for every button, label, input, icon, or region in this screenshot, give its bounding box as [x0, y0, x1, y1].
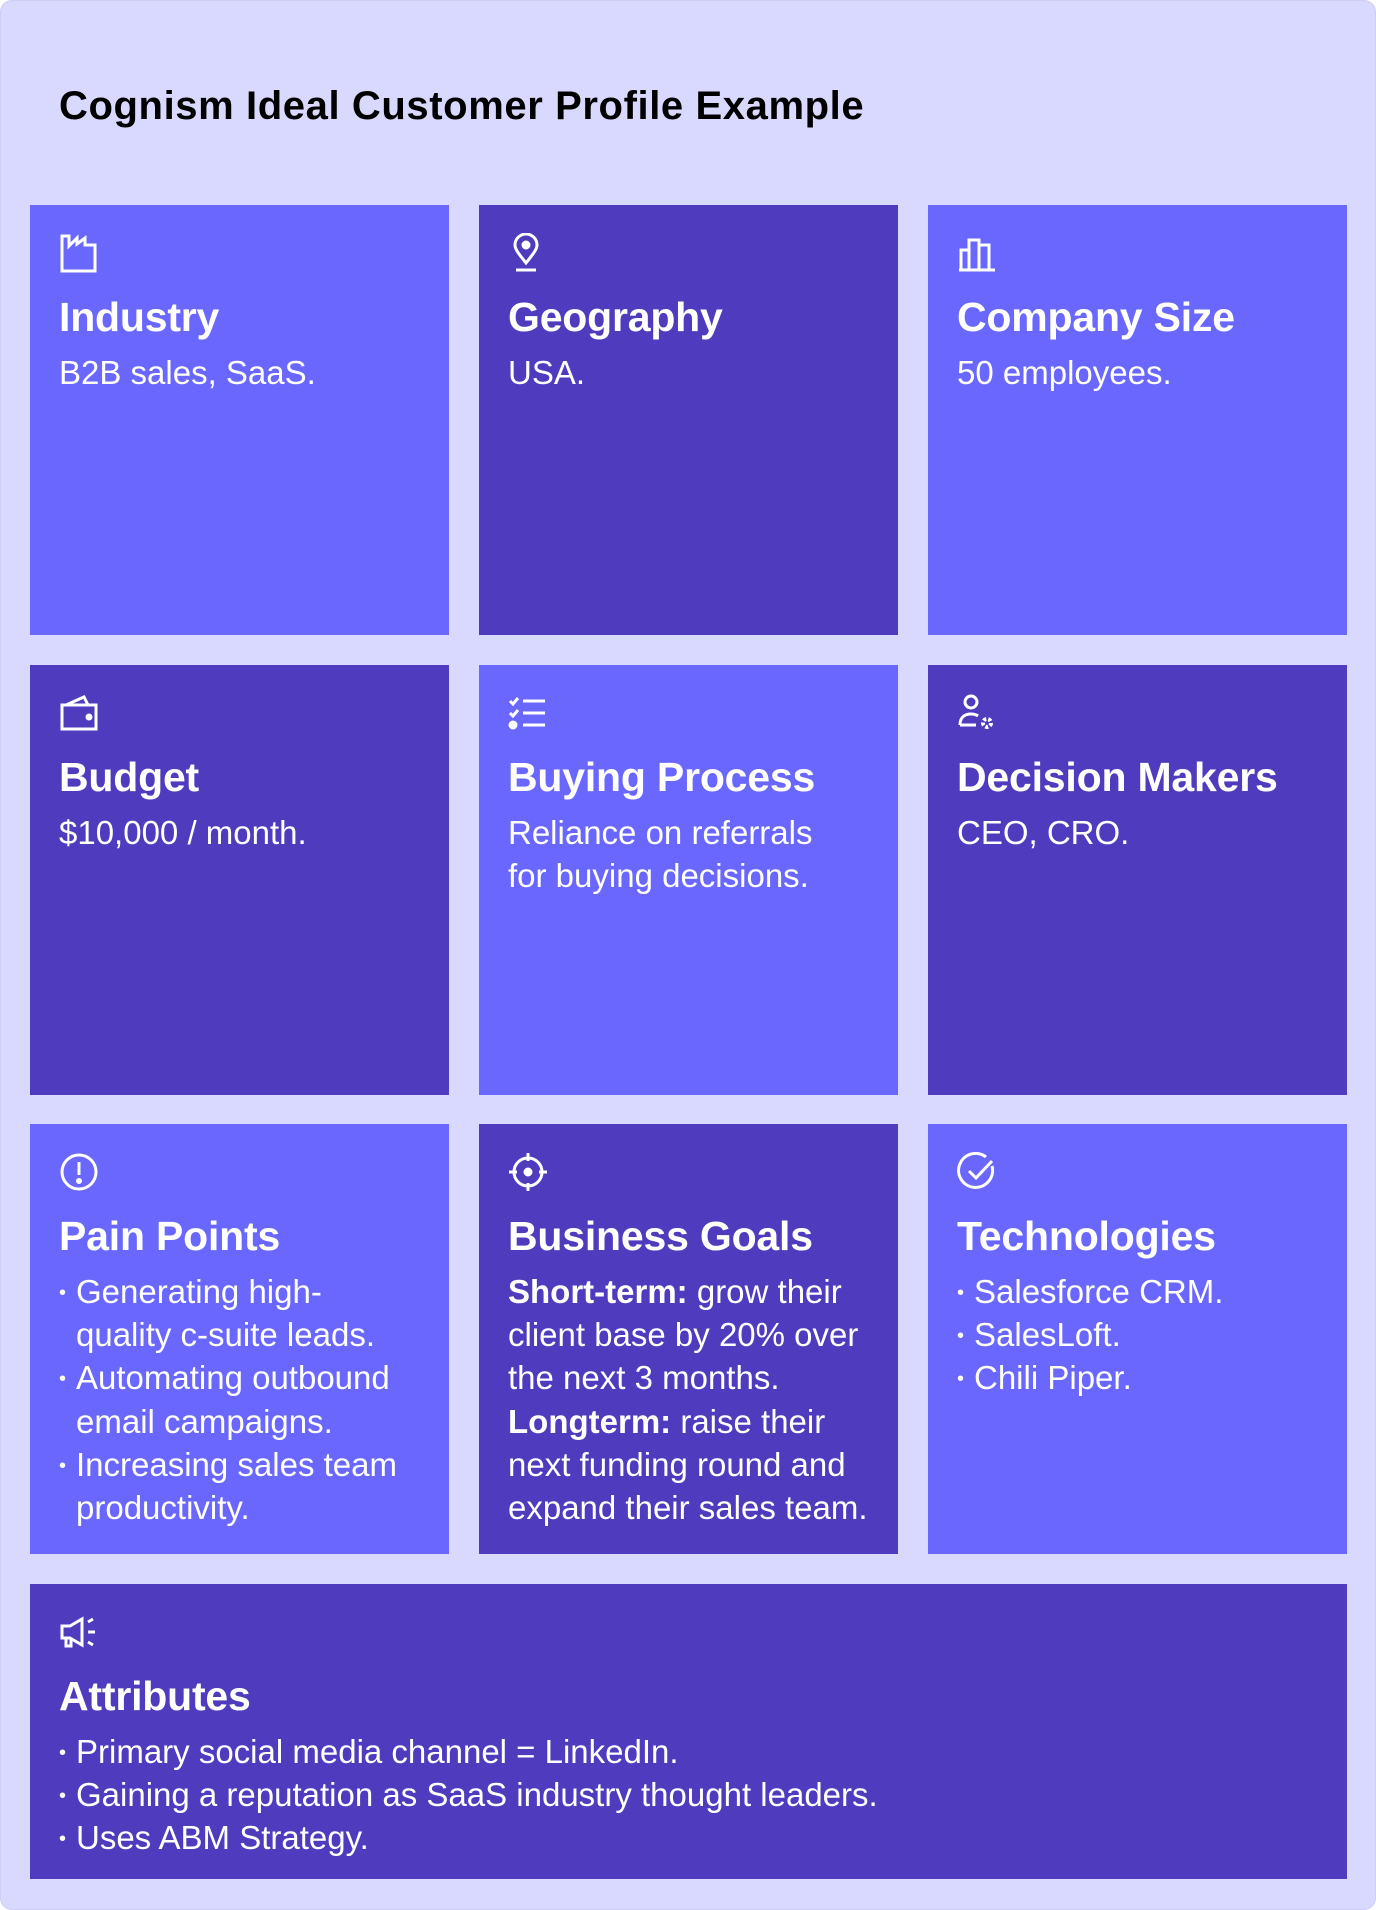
panel: buying process — [479, 665, 898, 1095]
bullet list: Generating high- — [76, 1273, 322, 1310]
bullet list: Increasing sales team — [76, 1446, 397, 1483]
text: for buying decisions. — [508, 857, 809, 894]
text: CEO, CRO. — [957, 814, 1129, 851]
bullet list: email campaigns. — [76, 1403, 333, 1440]
bullet list: SalesLoft. — [974, 1316, 1121, 1353]
text: client base by 20% over — [508, 1316, 858, 1353]
bullet list — [958, 1273, 1223, 1396]
panel: budget — [30, 665, 449, 1095]
panel: technologies — [928, 1124, 1347, 1554]
icon: factory — [60, 234, 96, 272]
icon: location pin — [514, 233, 538, 272]
text: USA. — [508, 354, 585, 391]
text: Longterm: raise their — [508, 1403, 825, 1440]
panel: decision makers — [928, 665, 1347, 1095]
panel: geography — [479, 205, 898, 635]
text — [508, 1273, 868, 1526]
icon: megaphone — [60, 1616, 95, 1648]
text: Short-term: grow their — [508, 1273, 842, 1310]
heading: Industry — [59, 294, 219, 340]
panel: industry — [30, 205, 449, 635]
bullet list: Salesforce CRM. — [974, 1273, 1223, 1310]
icon: wallet — [60, 695, 98, 730]
heading: Business Goals — [508, 1213, 813, 1259]
icon: checklist — [508, 697, 545, 730]
heading: Decision Makers — [957, 754, 1278, 800]
panel: attributes — [30, 1584, 1347, 1879]
heading: Company Size — [957, 294, 1235, 340]
heading: Geography — [508, 294, 723, 340]
icon: user gear — [958, 694, 993, 729]
heading: Pain Points — [59, 1213, 280, 1259]
bullet list — [60, 1733, 878, 1856]
text: the next 3 months. — [508, 1359, 780, 1396]
bullet list: Uses ABM Strategy. — [76, 1819, 369, 1856]
text: next funding round and — [508, 1446, 846, 1483]
text: 50 employees. — [957, 354, 1172, 391]
text: $10,000 / month. — [59, 814, 307, 851]
panel: pain points — [30, 1124, 449, 1554]
heading: Buying Process — [508, 754, 815, 800]
heading: Attributes — [59, 1673, 251, 1719]
panel: company size — [928, 205, 1347, 635]
text: Reliance on referrals — [508, 814, 812, 851]
text — [508, 814, 812, 894]
heading: Technologies — [957, 1213, 1216, 1259]
icon: check circle — [957, 1152, 994, 1189]
heading: Budget — [59, 754, 199, 800]
icon: buildings — [959, 238, 995, 272]
title: Cognism Ideal Customer Profile Example — [59, 84, 864, 128]
text: expand their sales team. — [508, 1489, 868, 1526]
panel: business goals — [479, 1124, 898, 1554]
bullet list: Gaining a reputation as SaaS industry thought leaders. — [76, 1776, 878, 1813]
icon: alert — [60, 1154, 98, 1190]
bullet list: Primary social media channel = LinkedIn. — [76, 1733, 679, 1770]
bullet list: productivity. — [76, 1489, 250, 1526]
icon: target — [509, 1153, 547, 1191]
text: B2B sales, SaaS. — [59, 354, 316, 391]
bullet list: Automating outbound — [76, 1359, 390, 1396]
bullet list — [60, 1273, 397, 1526]
bullet list: Chili Piper. — [974, 1359, 1132, 1396]
bullet list: quality c-suite leads. — [76, 1316, 375, 1353]
